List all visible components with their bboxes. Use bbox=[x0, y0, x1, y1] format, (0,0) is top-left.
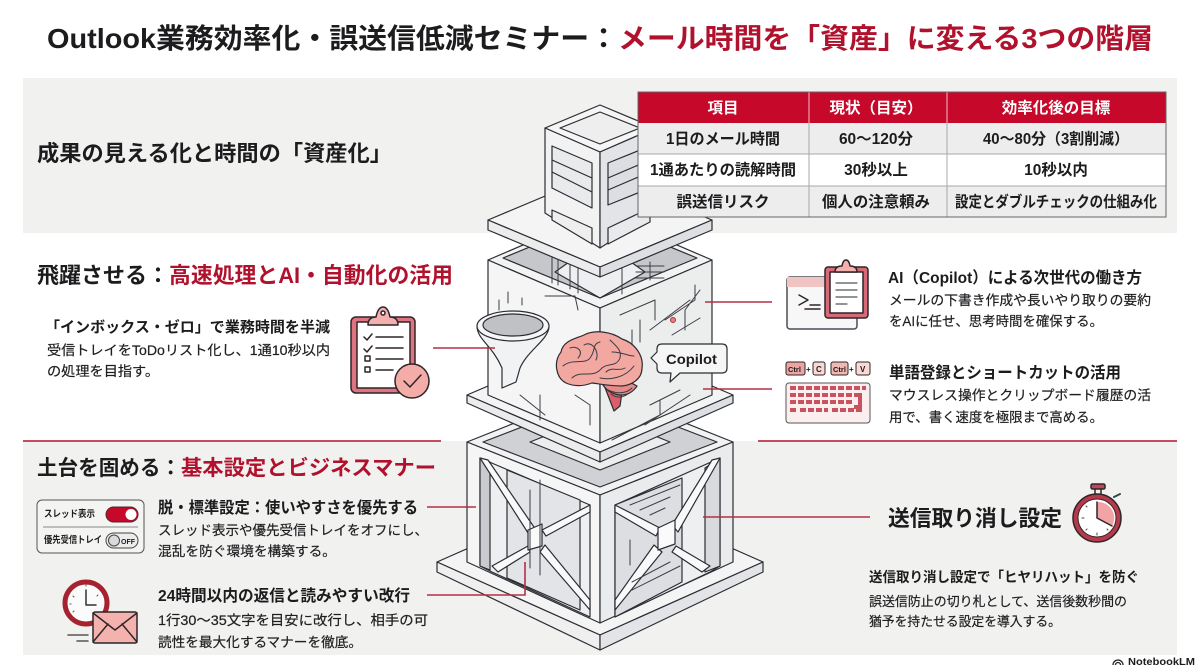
comparison table: 設定とダブルチェックの仕組み化 bbox=[955, 192, 1157, 211]
icon: keyboard shortcuts: V bbox=[860, 365, 866, 374]
text block: settings bbox=[158, 498, 428, 559]
text block: settings: 混乱を防ぐ環境を構築する。 bbox=[158, 544, 336, 559]
comparison table: 項目 bbox=[707, 100, 739, 117]
comparison table: 誤送信リスク bbox=[676, 193, 770, 211]
tower top building bbox=[545, 105, 655, 248]
panel: top band results bbox=[23, 78, 1177, 233]
comparison table: 60〜120分 bbox=[839, 130, 914, 148]
tower foundation frame bbox=[467, 389, 733, 623]
icon: keyboard shortcuts: + bbox=[806, 365, 811, 374]
heading: send cancel: 送信取り消し設定 bbox=[888, 506, 1062, 531]
text block: settings: スレッド表示や優先受信トレイをオフにし、 bbox=[158, 523, 428, 538]
text block: shortcuts: 用で、書く速度を極限まで高める。 bbox=[889, 409, 1103, 425]
comparison table: 現状（目安） bbox=[829, 98, 923, 117]
icon: checklist clipboard bbox=[351, 307, 429, 398]
tower middle plate bbox=[467, 338, 733, 462]
text block: shortcuts: マウスレス操作とクリップボード履歴の活 bbox=[889, 388, 1151, 403]
comparison table: 効率化後の目標 bbox=[1002, 98, 1111, 117]
icon: keyboard shortcuts: + bbox=[849, 365, 854, 374]
text block: AI Copilot: AI（Copilot）による次世代の働き方 bbox=[888, 268, 1142, 287]
icon: funnel bbox=[477, 311, 549, 388]
title: メール時間を「資産」に変える3つの階層 bbox=[618, 23, 1153, 54]
heading: speed and AI: 高速処理とAI・自動化の活用 bbox=[169, 263, 453, 288]
text block: settings: 脱・標準設定：使いやすさを優先する bbox=[158, 498, 418, 517]
tower base plate bbox=[437, 490, 763, 650]
icon: stopwatch bbox=[1073, 484, 1121, 542]
icon: keyboard shortcuts bbox=[786, 362, 870, 423]
text block: AI Copilot bbox=[888, 268, 1151, 329]
text block: send cancel: 誤送信防止の切り札として、送信後数秒間の bbox=[869, 594, 1127, 609]
tower circuit lines bbox=[499, 285, 700, 440]
text block: replies bbox=[158, 586, 428, 650]
tower top plate bbox=[488, 173, 712, 277]
comparison table: 10秒以内 bbox=[1024, 161, 1088, 179]
icon: AI window and clipboard bbox=[787, 260, 868, 329]
text block: shortcuts: 単語登録とショートカットの活用 bbox=[889, 363, 1121, 382]
connector lines bbox=[23, 302, 1177, 595]
text block: AI Copilot: をAIに任せ、思考時間を確保する。 bbox=[889, 314, 1103, 329]
text block: send cancel: 猶予を持たせる設定を導入する。 bbox=[869, 614, 1061, 629]
text block: replies: 読性を最大化するマナーを徹底。 bbox=[158, 634, 362, 650]
icon: settings toggles bbox=[37, 500, 144, 553]
text block: send cancel: 送信取り消し設定で「ヒヤリハット」を防ぐ bbox=[869, 569, 1139, 585]
text block: inbox zero: 受信トレイをToDoリスト化し、1通10秒以内 bbox=[47, 343, 330, 358]
text block: inbox zero bbox=[45, 318, 330, 379]
tower middle box bbox=[488, 212, 712, 443]
title bbox=[47, 23, 1153, 54]
comparison table: 40〜80分（3割削減） bbox=[983, 130, 1129, 148]
text block: inbox zero: の処理を目指す。 bbox=[47, 364, 159, 379]
icon: settings toggles: 優先受信トレイ bbox=[44, 534, 102, 546]
heading: speed and AI: 飛躍させる： bbox=[37, 263, 169, 288]
comparison table: 個人の注意頼み bbox=[822, 193, 930, 211]
title: Outlook業務効率化・誤送信低減セミナー： bbox=[47, 23, 618, 54]
comparison table: 1日のメール時間 bbox=[666, 130, 780, 148]
text block: shortcuts bbox=[889, 363, 1151, 425]
text block: inbox zero: 「インボックス・ゼロ」で業務時間を半減 bbox=[45, 318, 330, 336]
tower illustration bbox=[437, 105, 763, 650]
icon: brain bbox=[556, 332, 642, 411]
heading: foundation: 土台を固める： bbox=[37, 457, 181, 480]
panel: bottom band foundation bbox=[23, 441, 1177, 655]
comparison table: 1通あたりの読解時間 bbox=[650, 161, 796, 179]
text block: replies: 1行30〜35文字を目安に改行し、相手の可 bbox=[158, 613, 428, 628]
callout: Copilot bubble bbox=[651, 344, 727, 382]
callout: Copilot bubble: Copilot bbox=[666, 351, 717, 367]
heading: results: 成果の見える化と時間の「資産化」 bbox=[37, 141, 392, 166]
text block: AI Copilot: メールの下書き作成や長いやり取りの要約 bbox=[889, 293, 1151, 308]
icon: settings toggles: スレッド表示 bbox=[44, 508, 95, 520]
icon: keyboard shortcuts: Ctrl bbox=[788, 365, 801, 374]
icon: clock and mail bbox=[65, 582, 137, 643]
heading: speed and AI bbox=[37, 263, 453, 288]
watermark: NotebookLM: NotebookLM bbox=[1128, 656, 1195, 668]
comparison table bbox=[638, 92, 1166, 217]
text block: send cancel bbox=[869, 569, 1139, 629]
comparison table: 30秒以上 bbox=[844, 161, 908, 179]
heading: foundation: 基本設定とビジネスマナー bbox=[181, 457, 436, 480]
icon: keyboard shortcuts: C bbox=[816, 365, 822, 374]
icon: settings toggles: OFF bbox=[121, 539, 136, 546]
heading: foundation bbox=[37, 457, 436, 480]
icon: keyboard shortcuts: Ctrl bbox=[833, 365, 846, 374]
text block: replies: 24時間以内の返信と読みやすい改行 bbox=[158, 586, 410, 605]
